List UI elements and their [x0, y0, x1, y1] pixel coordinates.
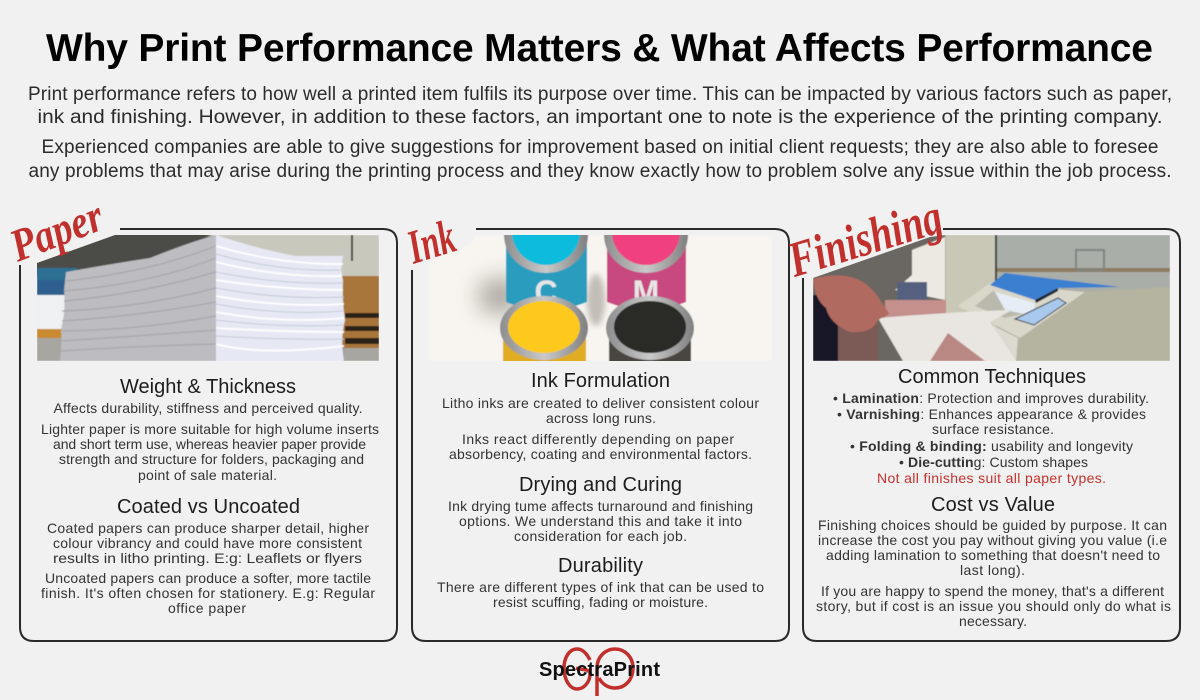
- text: coated details: [41, 520, 375, 616]
- heading: coated vs uncoated: Coated vs Uncoated: [117, 496, 300, 518]
- magenta tin: [604, 235, 688, 306]
- text: technique bullets: • Lamination: Protection and improves durability.: [833, 390, 1149, 406]
- text: formulation details: [442, 395, 759, 462]
- logo: SpectraPrint: [539, 649, 660, 696]
- text: cost details: increase the cost you pay without giving you value (i.e: [818, 532, 1167, 548]
- label: Finishing: Finishing: [781, 188, 949, 288]
- heading: durability: Durability: [558, 555, 643, 577]
- magenta tin: M: [633, 274, 659, 310]
- text: formulation details: Litho inks are created to deliver consistent colour: [442, 395, 759, 411]
- intro text: Experienced companies are able to give suggestions for improvement based on initial client requests; they are also able to foresee: [42, 137, 1158, 158]
- text: coated details: Coated papers can produce sharper detail, higher: [47, 520, 369, 536]
- black tin: [606, 296, 694, 368]
- text: drying details: consideration for each job.: [514, 528, 687, 544]
- text: weight details: Affects durability, stiffness and perceived quality.: [54, 400, 362, 416]
- text: cost details: Finishing choices should be guided by purpose. It can: [818, 517, 1167, 533]
- machine body: [1015, 287, 1170, 361]
- blue paper: [990, 273, 1120, 300]
- intro text: [28, 84, 1172, 182]
- text: drying details: options. We understand this and take it into: [459, 513, 742, 529]
- title: Why Print Performance Matters & What Affects Performance: [46, 27, 1153, 70]
- film sheet: [878, 310, 1016, 361]
- heading: weight and thickness: Weight & Thickness: [120, 376, 296, 398]
- right face of stack: [216, 235, 345, 361]
- heading: ink formulation: Ink Formulation: [531, 370, 670, 392]
- heading: common techniques: Common Techniques: [898, 366, 1086, 388]
- text: weight details: [41, 400, 379, 483]
- text: durability details: There are different types of ink that can be used to: [437, 579, 764, 595]
- text: technique bullets: surface resistance.: [932, 421, 1054, 437]
- logo wordmark: SpectraPrint: [539, 659, 660, 681]
- text: durability details: [437, 579, 764, 610]
- image: ink tins: [466, 235, 694, 361]
- text: weight details: Lighter paper is more suitable for high volume inserts: [41, 421, 379, 437]
- logo mark: [564, 649, 633, 696]
- control screen: [1015, 298, 1066, 325]
- text: technique bullets: • Varnishing: Enhances appearance & provides: [837, 406, 1146, 422]
- text: technique bullets: [833, 390, 1149, 486]
- label: Paper: Paper: [2, 189, 111, 272]
- text: coated details: results in litho printing. E:g: Leaflets or flyers: [53, 550, 362, 566]
- text: cost details: story, but if cost is an issue you should only do what is: [816, 598, 1171, 614]
- cyan tin: [504, 235, 588, 306]
- hand: [813, 275, 890, 332]
- text: weight details: point of sale material.: [138, 467, 277, 483]
- text: cost details: [816, 517, 1171, 629]
- text: formulation details: across long runs.: [546, 410, 656, 426]
- text: drying details: [448, 498, 753, 544]
- text: durability details: resist scuffing, fading or moisture.: [493, 594, 708, 610]
- text: technique bullets: • Die-cutting: Custom shapes: [899, 454, 1088, 470]
- heading: cost vs value: Cost vs Value: [931, 494, 1055, 516]
- yellow tin: [500, 296, 588, 368]
- panel: ink: [412, 197, 789, 641]
- cyan tin: C: [534, 274, 558, 310]
- text: technique bullets: Not all finishes suit all paper types.: [877, 470, 1106, 486]
- text: coated details: colour vibrancy and could have more consistent: [53, 535, 362, 551]
- text: drying details: Ink drying tume affects turnaround and finishing: [448, 498, 753, 514]
- panel: paper: [20, 228, 397, 641]
- text: cost details: last long).: [960, 562, 1025, 578]
- image: laminating machine: [813, 235, 1170, 361]
- text: coated details: office paper: [168, 600, 246, 616]
- left face of stack: [60, 235, 216, 361]
- text: coated details: Uncoated papers can produce a softer, more tactile: [45, 570, 371, 586]
- intro text: ink and finishing. However, in addition to these factors, an important one to note is the experience of the printing company.: [38, 107, 1162, 128]
- text: weight details: strength and structure for folders, packaging and: [59, 451, 364, 467]
- intro text: any problems that may arise during the printing process and they know exactly how to problem solve any issue within the job process.: [28, 161, 1172, 182]
- text: cost details: adding lamination to something that doesn't need to: [826, 547, 1160, 563]
- label: Ink: Ink: [401, 210, 462, 275]
- intro text: Print performance refers to how well a printed item fulfils its purpose over time. This can be impacted by various factors such as paper,: [28, 84, 1172, 105]
- text: formulation details: absorbency, coating and environmental factors.: [449, 446, 752, 462]
- image: paper stack: [30, 228, 379, 361]
- text: cost details: If you are happy to spend the money, that's a different: [821, 583, 1164, 599]
- text: weight details: and short term use, whereas heavier paper provide: [53, 436, 366, 452]
- text: cost details: necessary.: [959, 613, 1027, 629]
- text: formulation details: Inks react differently depending on paper: [462, 431, 734, 447]
- text: technique bullets: • Folding & binding: usability and longevity: [850, 438, 1133, 454]
- text: coated details: finish. It's often chosen for stationery. E.g: Regular: [41, 585, 375, 601]
- heading: drying and curing: Drying and Curing: [519, 474, 682, 496]
- panel: finishing: [803, 229, 1180, 641]
